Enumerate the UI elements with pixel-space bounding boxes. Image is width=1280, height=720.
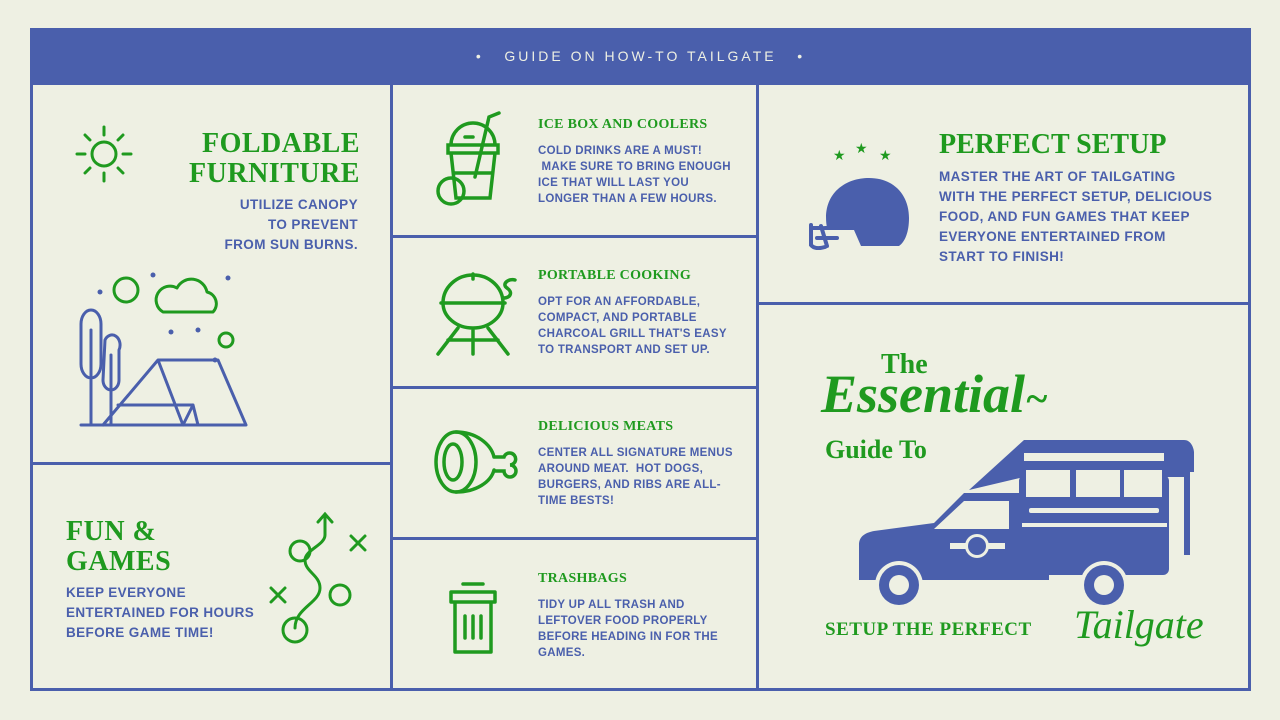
header bar: [30, 28, 1251, 85]
icon: helmet: ★: [855, 140, 868, 156]
heading: [66, 516, 171, 577]
text: MASTER THE ART OF TAILGATING: [939, 169, 1176, 184]
icon: truck: [859, 440, 1194, 605]
subtitle: SETUP THE PERFECT: [825, 619, 1032, 640]
text: TIME BESTS!: [538, 495, 614, 507]
heading: FOLDABLE: [202, 128, 360, 159]
panel: delicious meats: [390, 386, 759, 540]
heading: GAMES: [66, 546, 171, 577]
text: [939, 169, 1212, 264]
icon: grill: [436, 272, 517, 356]
panel: perfect setup: [756, 82, 1251, 305]
text: FOOD, AND FUN GAMES THAT KEEP: [939, 209, 1190, 224]
text: COMPACT, AND PORTABLE: [538, 312, 697, 324]
heading: PERFECT SETUP: [939, 129, 1166, 160]
panel: portable cooking: [390, 235, 759, 389]
text: [538, 145, 731, 205]
icon: play diagram: [269, 512, 367, 644]
icon: helmet: [809, 140, 909, 250]
text: LEFTOVER FOOD PROPERLY: [538, 615, 708, 627]
text: TIDY UP ALL TRASH AND: [538, 599, 685, 611]
panel: ice box: [390, 82, 759, 238]
text: GAMES.: [538, 647, 585, 659]
panel: fun and games: [30, 462, 393, 691]
text: FROM SUN BURNS.: [224, 237, 358, 252]
icon: sun: [76, 126, 132, 182]
text: OPT FOR AN AFFORDABLE,: [538, 296, 700, 308]
heading: FUN &: [66, 516, 156, 547]
text: COLD DRINKS ARE A MUST!: [538, 145, 702, 157]
text: BEFORE HEADING IN FOR THE: [538, 631, 718, 643]
text: TO TRANSPORT AND SET UP.: [538, 344, 710, 356]
heading: ICE BOX AND COOLERS: [538, 117, 707, 132]
panel: trashbags: [390, 537, 759, 691]
header bar: • GUIDE ON HOW-TO TAILGATE •: [476, 48, 805, 64]
text: WITH THE PERFECT SETUP, DELICIOUS: [939, 189, 1212, 204]
text: START TO FINISH!: [939, 249, 1064, 264]
heading: PORTABLE COOKING: [538, 268, 691, 283]
text: TO PREVENT: [268, 217, 358, 232]
icon: helmet: ★: [833, 147, 846, 163]
text: BURGERS, AND RIBS ARE ALL-: [538, 479, 721, 491]
text: [538, 296, 727, 356]
text: [538, 599, 718, 659]
heading: [189, 128, 360, 189]
text: KEEP EVERYONE: [66, 585, 186, 600]
icon: trash can: [449, 582, 497, 654]
text: CHARCOAL GRILL THAT'S EASY: [538, 328, 727, 340]
icon: helmet: ★: [879, 147, 892, 163]
panel: essential guide: Guide To: [825, 435, 927, 464]
text: MAKE SURE TO BRING ENOUGH: [541, 161, 731, 173]
text: LONGER THAN A FEW HOURS.: [538, 193, 717, 205]
text: ENTERTAINED FOR HOURS: [66, 605, 254, 620]
text: [538, 447, 733, 507]
text: UTILIZE CANOPY: [240, 197, 358, 212]
heading: DELICIOUS MEATS: [538, 419, 673, 434]
text: BEFORE GAME TIME!: [66, 625, 214, 640]
panel: essential guide: [756, 302, 1251, 691]
panel: essential guide: Essential~: [821, 364, 1048, 424]
icon: drink: [436, 111, 501, 206]
text: [66, 585, 254, 640]
title text: The: [881, 349, 928, 380]
heading: FURNITURE: [189, 158, 360, 189]
icon: meat: [434, 430, 518, 494]
heading: TRASHBAGS: [538, 571, 627, 586]
panel: essential guide: Tailgate: [1074, 602, 1204, 647]
text: AROUND MEAT. HOT DOGS,: [538, 463, 703, 475]
text: [224, 197, 358, 252]
text: ICE THAT WILL LAST YOU: [538, 177, 689, 189]
text: CENTER ALL SIGNATURE MENUS: [538, 447, 733, 459]
panel: foldable furniture: [30, 82, 393, 465]
text: EVERYONE ENTERTAINED FROM: [939, 229, 1166, 244]
icon: tent scene: [80, 272, 248, 427]
